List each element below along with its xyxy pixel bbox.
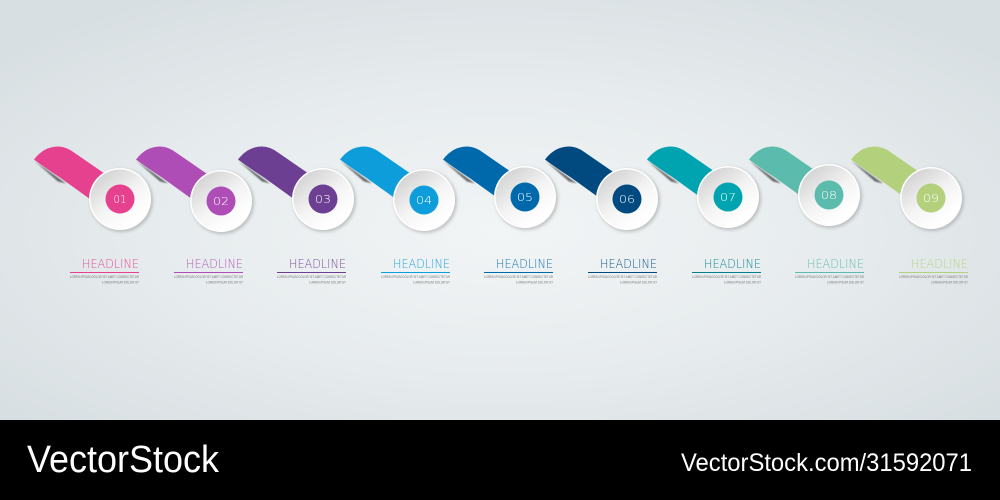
step 06 (545, 146, 660, 232)
step 01 (34, 146, 153, 232)
ribbon 09 (851, 146, 941, 214)
number 03: 03 (315, 193, 331, 206)
headline 08: LOREM IPSUM DOLOR SIT AMET CONSECTETUR (795, 275, 864, 279)
disc 03 (292, 168, 356, 232)
headline 09: LOREM IPSUM DOLOR SIT AMET CONSECTETUR (899, 275, 968, 279)
number 07: 07 (720, 191, 736, 204)
headline 05: LOREM IPSUM DOLOR ST (516, 280, 553, 284)
headline 07 (692, 257, 761, 284)
ribbon 07 (647, 146, 737, 214)
number 06: 06 (619, 193, 635, 206)
headline 09 (899, 257, 968, 284)
headline 04: HEADLINE (393, 257, 450, 271)
ribbon 08 (749, 146, 839, 214)
headline 07: LOREM IPSUM DOLOR ST (724, 280, 761, 284)
headline 01: LOREM IPSUM DOLOR SIT AMET CONSECTETUR (70, 275, 139, 279)
headline 07: LOREM IPSUM DOLOR SIT AMET CONSECTETUR (692, 275, 761, 279)
headline 03: LOREM IPSUM DOLOR SIT AMET CONSECTETUR (277, 275, 346, 279)
disc 07 (697, 166, 761, 230)
headline 02: LOREM IPSUM DOLOR ST (206, 280, 243, 284)
disc 02 (190, 170, 254, 234)
headline 01: HEADLINE (82, 257, 139, 271)
number 01: 01 (114, 193, 126, 206)
headline 06: HEADLINE (600, 257, 657, 271)
watermark logo text: VectorStock (27, 439, 220, 481)
disc 05 (494, 166, 558, 230)
headline 05 (484, 257, 553, 284)
ribbon 05 (443, 146, 533, 214)
ribbon 04 (340, 146, 430, 214)
number 08: 08 (821, 189, 837, 202)
step 08 (749, 146, 862, 228)
headline 03: HEADLINE (289, 257, 346, 271)
step 03 (238, 146, 356, 232)
headline 02: LOREM IPSUM DOLOR SIT AMET CONSECTETUR (174, 275, 243, 279)
headline 04: LOREM IPSUM DOLOR ST (413, 280, 450, 284)
headline 08: HEADLINE (807, 257, 864, 271)
disc 01 (89, 168, 153, 232)
headline 04 (381, 257, 450, 284)
ribbon 01 (34, 146, 124, 214)
number 09: 09 (923, 192, 939, 205)
step 05 (443, 146, 558, 230)
step 07 (647, 146, 761, 230)
headline 07: HEADLINE (704, 257, 761, 271)
ribbon 06 (545, 146, 635, 214)
watermark bar (0, 420, 1000, 500)
headline 09: HEADLINE (911, 257, 968, 271)
number 05: 05 (517, 191, 533, 204)
step 09 (851, 146, 964, 231)
headline 05: LOREM IPSUM DOLOR SIT AMET CONSECTETUR (484, 275, 553, 279)
headline 08: LOREM IPSUM DOLOR ST (827, 280, 864, 284)
disc 09 (900, 167, 964, 231)
headline 06 (588, 257, 657, 284)
headline 02: HEADLINE (186, 257, 243, 271)
headline 01 (70, 257, 139, 284)
ribbon 02 (136, 146, 226, 214)
headline 09: LOREM IPSUM DOLOR ST (931, 280, 968, 284)
headline 08 (795, 257, 864, 284)
headline 04: LOREM IPSUM DOLOR SIT AMET CONSECTETUR (381, 275, 450, 279)
disc 08 (798, 164, 862, 228)
headline 02 (174, 257, 243, 284)
headline 06: LOREM IPSUM DOLOR SIT AMET CONSECTETUR (588, 275, 657, 279)
headline 06: LOREM IPSUM DOLOR ST (620, 280, 657, 284)
headline 01: LOREM IPSUM DOLOR ST (102, 280, 139, 284)
disc 04 (393, 169, 457, 233)
step 02 (136, 146, 254, 234)
headline 05: HEADLINE (496, 257, 553, 271)
headline 03: LOREM IPSUM DOLOR ST (309, 280, 346, 284)
disc 06 (596, 168, 660, 232)
number 04: 04 (416, 194, 432, 207)
number 02: 02 (213, 195, 229, 208)
ribbon 03 (238, 146, 328, 214)
watermark image id: VectorStock.com/31592071 (681, 449, 972, 477)
step 04 (340, 146, 457, 233)
headline 03 (277, 257, 346, 284)
